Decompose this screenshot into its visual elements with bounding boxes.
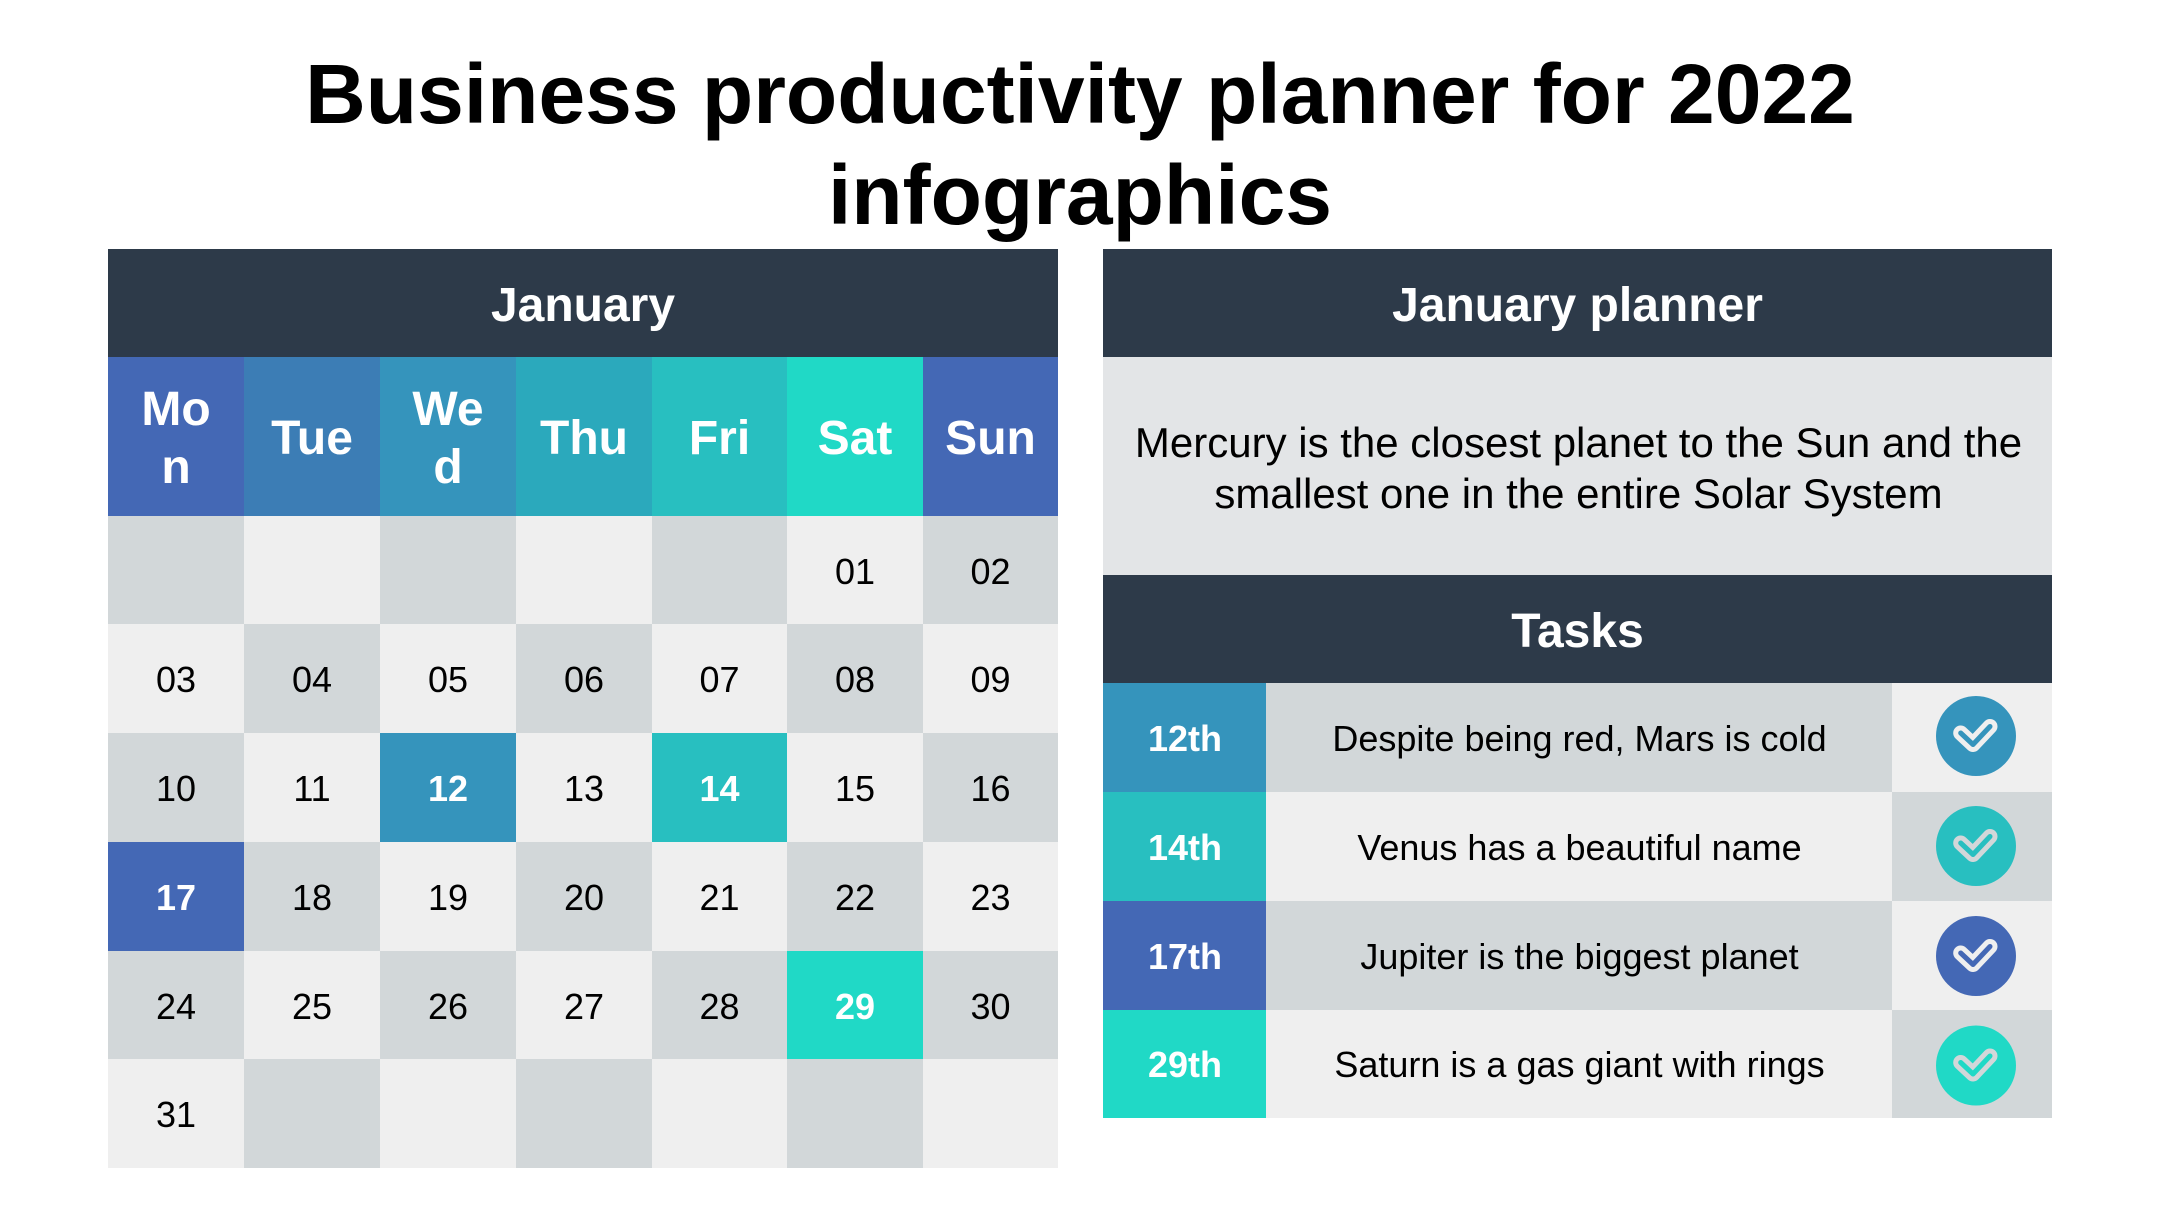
calendar heading [108, 249, 1058, 357]
date grid: 22 [835, 877, 875, 918]
tasks heading [1103, 575, 2052, 683]
date grid: 23 [970, 877, 1011, 918]
date grid: 26 [428, 986, 468, 1026]
weekday header row: We [412, 383, 484, 436]
date grid: 18 [292, 877, 332, 918]
weekday header row: Sat [818, 412, 892, 465]
date grid: 30 [970, 986, 1011, 1026]
tasks heading: Tasks [1511, 605, 1644, 658]
date grid: 04 [292, 659, 332, 700]
planner heading [1103, 249, 2052, 357]
date grid: 14 [699, 768, 740, 809]
title: Business productivity planner for 2022 [305, 47, 1855, 141]
task row: 12th: 12th [1148, 718, 1222, 758]
date grid: 15 [835, 768, 875, 809]
date grid: 05 [428, 659, 468, 700]
icon: check 12th [1936, 696, 2016, 776]
date grid: 13 [564, 768, 604, 809]
date grid: 21 [699, 877, 740, 918]
date grid: 03 [156, 659, 196, 700]
task row: 17th: Jupiter is the biggest planet [1360, 936, 1799, 976]
date grid [108, 516, 1058, 1168]
date grid: 17 [156, 877, 196, 918]
title: infographics [828, 148, 1332, 242]
weekday header row: Sun [945, 412, 1036, 465]
panel: tasks [1103, 575, 2052, 1118]
date grid: 31 [156, 1094, 196, 1135]
task row: 29th: 29th [1148, 1044, 1222, 1085]
icon: check 29th [1936, 1026, 2016, 1106]
task row: 12th [1103, 683, 2052, 792]
task row: 17th: 17th [1148, 936, 1222, 976]
date grid: 25 [292, 986, 332, 1026]
task row: 14th: Venus has a beautiful name [1357, 826, 1802, 868]
date grid: 06 [564, 659, 604, 700]
weekday header row: Mo [141, 383, 211, 436]
weekday header row: n [161, 441, 191, 494]
date grid: 27 [564, 986, 604, 1026]
planner description: smallest one in the entire Solar System [1214, 470, 1943, 516]
weekday header row: Fri [689, 412, 750, 465]
calendar heading: January [491, 279, 675, 332]
date grid: 10 [156, 768, 196, 809]
task row: 14th [1103, 792, 2052, 901]
date grid: 12 [428, 768, 468, 809]
icon: check 14th [1936, 806, 2016, 886]
date grid: 28 [699, 986, 740, 1026]
date grid: 09 [970, 659, 1011, 700]
title [305, 47, 1855, 242]
date grid: 07 [699, 659, 740, 700]
task row: 17th [1103, 901, 2052, 1010]
weekday header row: Thu [540, 412, 628, 465]
weekday header row: d [433, 441, 463, 494]
date grid: 24 [156, 986, 196, 1026]
icon: check 17th [1936, 916, 2016, 996]
panel: January planner [1103, 249, 2052, 575]
task row: 14th: 14th [1148, 826, 1222, 868]
planner description [1103, 357, 2052, 575]
task row: 12th: Despite being red, Mars is cold [1332, 718, 1827, 758]
panel: January calendar [108, 249, 1058, 1168]
date grid: 08 [835, 659, 875, 700]
planner description: Mercury is the closest planet to the Sun and the [1135, 418, 2022, 466]
date grid: 20 [564, 877, 604, 918]
date grid: 01 [835, 550, 875, 592]
date grid: 16 [970, 768, 1011, 809]
date grid: 02 [970, 550, 1011, 592]
weekday header row: Tue [271, 412, 353, 465]
date grid: 11 [293, 768, 331, 809]
planner heading: January planner [1392, 279, 1763, 332]
date grid: 19 [428, 877, 468, 918]
date grid: 29 [835, 986, 875, 1026]
task row: 29th [1103, 1010, 2052, 1118]
task row: 29th: Saturn is a gas giant with rings [1334, 1044, 1825, 1085]
weekday header row [108, 357, 1058, 516]
